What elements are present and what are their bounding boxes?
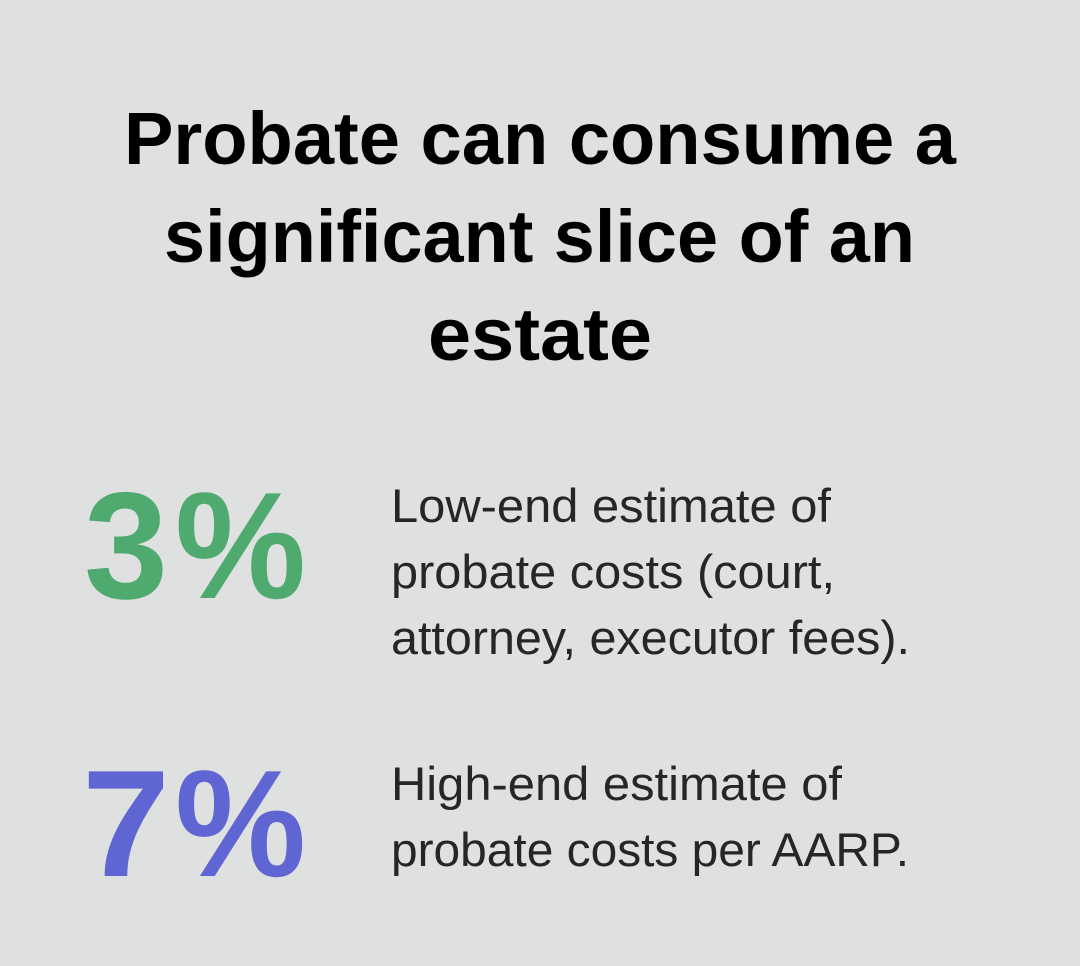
title [124, 97, 957, 376]
title: significant slice of an [164, 195, 915, 278]
description: high-end estimate: High-end estimate of [391, 757, 843, 810]
statistic: 7%: 7 [82, 739, 170, 909]
description: low-end estimate: Low-end estimate of [391, 479, 832, 532]
description: low-end estimate: attorney, executor fees). [391, 611, 910, 664]
statistic: 3%: 3 [84, 461, 168, 631]
statistic: 3% [84, 461, 306, 631]
description: low-end estimate: probate costs (court, [391, 545, 835, 598]
description: high-end estimate [391, 757, 909, 876]
description: low-end estimate [391, 479, 910, 664]
statistic: 3%: % [175, 461, 306, 631]
title: estate [428, 293, 652, 376]
description: high-end estimate: probate costs per AARP. [391, 823, 909, 876]
statistic: 7%: % [175, 739, 306, 909]
title: Probate can consume a [124, 97, 957, 180]
statistic: 7% [82, 739, 306, 909]
